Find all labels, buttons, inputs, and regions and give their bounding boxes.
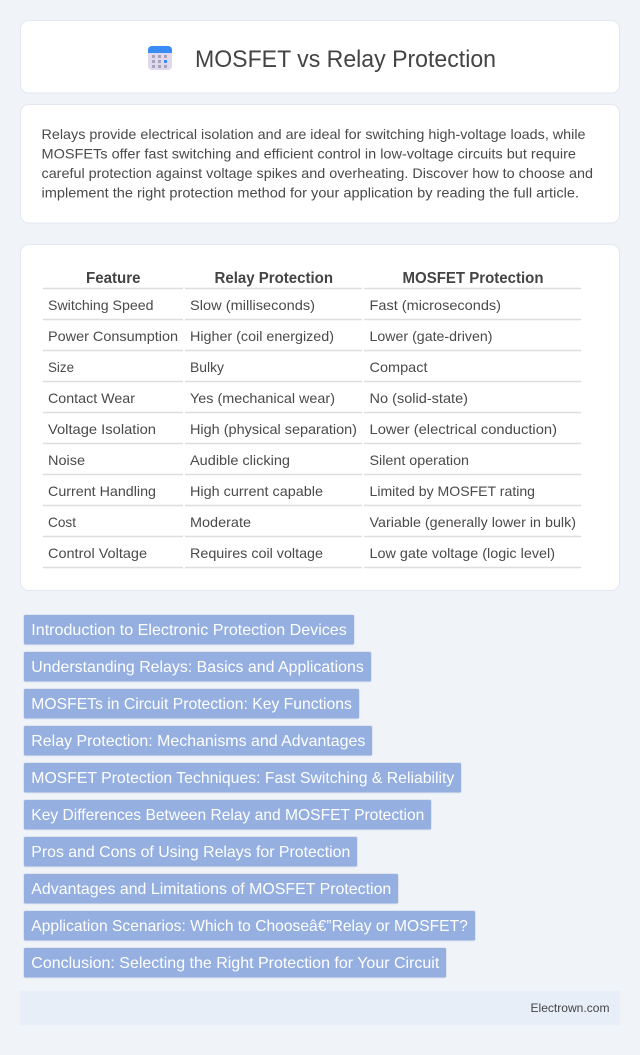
table header: Relay Protection [214, 270, 333, 287]
row: current handling: Current Handling [48, 483, 156, 499]
row: control voltage [48, 545, 555, 561]
link: pros and cons: Pros and Cons of Using Relays for Protection [31, 844, 350, 861]
panel: title header [20, 20, 620, 93]
link: pros and cons [24, 836, 358, 867]
row: cost: Moderate [190, 514, 251, 530]
panel: introduction [20, 104, 620, 223]
intro text: Relays provide electrical isolation and are ideal for switching high-voltage loads, while [42, 126, 586, 142]
link: application scenarios: Application Scenarios: Which to Chooseâ€”Relay or MOSFET? [31, 918, 468, 935]
row: cost: Variable (generally lower in bulk) [370, 514, 576, 530]
row: power consumption: Power Consumption [48, 328, 178, 344]
row: size [48, 359, 428, 375]
row: cost: Cost [48, 514, 76, 530]
row: control voltage: Low gate voltage (logic level) [370, 545, 555, 561]
row: contact wear: No (solid-state) [370, 390, 468, 406]
intro text: MOSFETs offer fast switching and efficient control in low-voltage circuits but require [42, 146, 576, 162]
intro text: implement the right protection method for your application by reading the full article. [42, 184, 579, 200]
intro text [42, 126, 593, 200]
row: noise [48, 452, 469, 468]
row: switching speed: Fast (microseconds) [370, 297, 501, 313]
row: power consumption [48, 328, 492, 344]
row: current handling: Limited by MOSFET rating [370, 483, 535, 499]
table of contents links [24, 614, 476, 978]
row: voltage isolation: Lower (electrical conduction) [370, 421, 557, 437]
link: key differences: Key Differences Between Relay and MOSFET Protection [31, 807, 424, 824]
table header [86, 270, 544, 287]
link: understanding relays: Understanding Relays: Basics and Applications [31, 659, 364, 676]
link: introduction: Introduction to Electronic Protection Devices [31, 622, 347, 639]
row: power consumption: Lower (gate-driven) [370, 328, 492, 344]
title: MOSFET vs Relay Protection [195, 46, 496, 73]
intro text: careful protection against voltage spikes and overheating. Discover how to choose and [42, 165, 593, 181]
link: introduction [24, 614, 354, 645]
row: cost [48, 514, 576, 530]
link: key differences [24, 800, 432, 830]
footer: Electrown.com [530, 1001, 610, 1015]
table header: Feature [86, 270, 141, 287]
row: contact wear [48, 390, 468, 406]
row: control voltage: Control Voltage [48, 545, 147, 561]
link: mosfets in circuit protection [24, 688, 360, 719]
row: current handling [48, 483, 535, 499]
link: understanding relays [24, 652, 372, 682]
icon: calendar [148, 46, 172, 70]
row: switching speed: Switching Speed [48, 297, 154, 313]
row: switching speed: Slow (milliseconds) [190, 297, 315, 313]
link: advantages and limitations: Advantages and Limitations of MOSFET Protection [31, 881, 391, 898]
row: contact wear: Contact Wear [48, 390, 135, 406]
row: voltage isolation: Voltage Isolation [48, 421, 156, 437]
link: relay protection: Relay Protection: Mechanisms and Advantages [31, 733, 365, 750]
row: size: Bulky [190, 359, 224, 375]
link: mosfets in circuit protection: MOSFETs in Circuit Protection: Key Functions [31, 696, 352, 713]
row: size: Compact [370, 359, 428, 375]
row: noise: Silent operation [370, 452, 469, 468]
link: mosfet techniques [24, 762, 462, 793]
row: noise: Audible clicking [190, 452, 290, 468]
footer [20, 991, 620, 1025]
link: conclusion: Conclusion: Selecting the Right Protection for Your Circuit [31, 955, 440, 972]
row: current handling: High current capable [190, 483, 323, 499]
row: voltage isolation: High (physical separation) [190, 421, 357, 437]
table header: MOSFET Protection [402, 270, 544, 287]
row: noise: Noise [48, 452, 85, 468]
row: size: Size [48, 359, 74, 375]
link: relay protection [24, 726, 372, 756]
row: power consumption: Higher (coil energized) [190, 328, 334, 344]
row: contact wear: Yes (mechanical wear) [190, 390, 335, 406]
link: advantages and limitations [24, 874, 398, 904]
row: voltage isolation [48, 421, 557, 437]
panel: comparison table [20, 244, 620, 590]
link: application scenarios [24, 910, 476, 941]
row: switching speed [48, 297, 501, 313]
row: control voltage: Requires coil voltage [190, 545, 323, 561]
link: conclusion [24, 948, 446, 978]
link: mosfet techniques: MOSFET Protection Techniques: Fast Switching & Reliability [31, 770, 454, 787]
